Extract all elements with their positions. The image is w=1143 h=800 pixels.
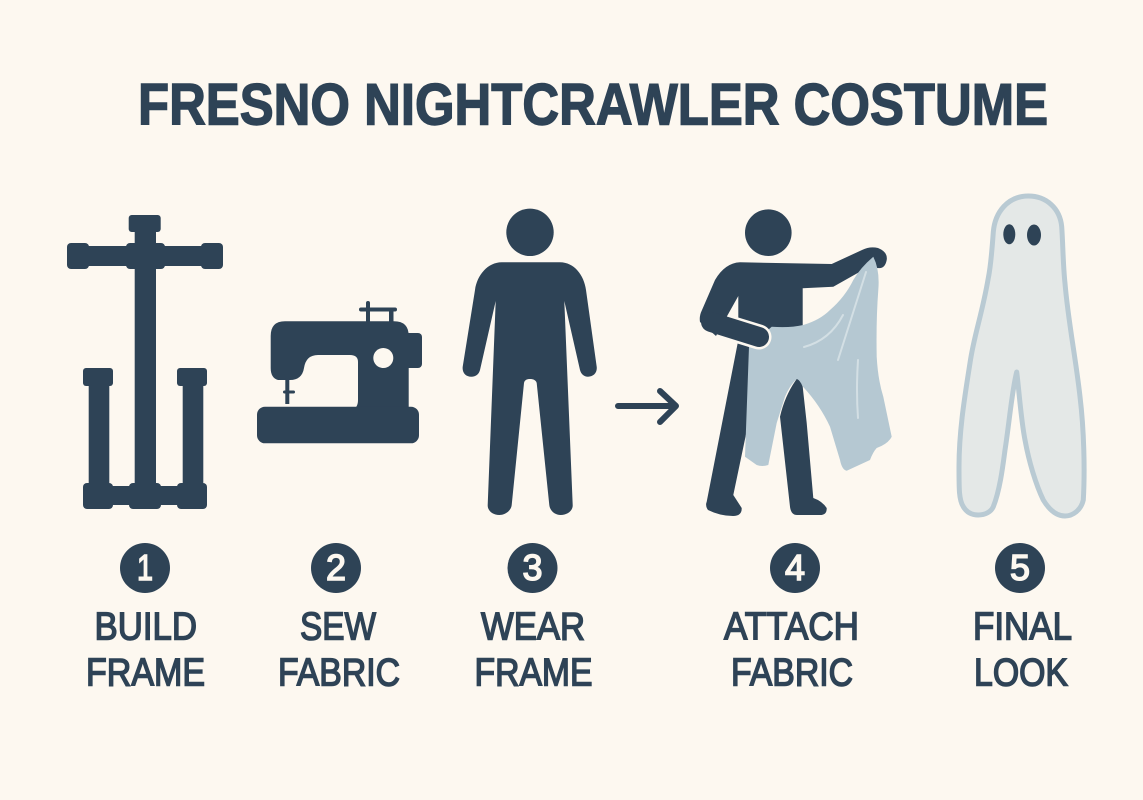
icon: pipe frame <box>67 215 223 509</box>
step 1: build frame: FRAME <box>86 652 205 694</box>
step 2: sew fabric: FABRIC <box>278 652 400 694</box>
step 2: sew fabric: 2 <box>326 547 346 588</box>
step 3: wear frame: FRAME <box>474 652 592 694</box>
step 3: wear frame: WEAR <box>481 606 585 648</box>
step 3: wear frame: 3 <box>522 547 542 588</box>
step 4: attach fabric: 4 <box>785 547 805 588</box>
step 4: attach fabric <box>724 543 859 694</box>
step 5: final look: FINAL <box>973 606 1072 648</box>
step 5: final look: 5 <box>1010 547 1030 588</box>
step 4: attach fabric: ATTACH <box>724 606 859 648</box>
arrow <box>618 391 676 422</box>
icon: sewing machine <box>257 301 422 443</box>
step 1: build frame: BUILD <box>94 606 197 648</box>
step 3: wear frame <box>474 543 592 694</box>
step 5: final look <box>973 543 1072 694</box>
icon: person standing <box>463 209 597 515</box>
icon: person attaching fabric <box>700 209 892 516</box>
step 1: build frame <box>86 543 205 694</box>
icon: ghost costume final look <box>959 196 1084 516</box>
step 4: attach fabric: FABRIC <box>731 652 853 694</box>
step 5: final look: LOOK <box>974 652 1068 694</box>
step 2: sew fabric: SEW <box>300 606 377 648</box>
step 1: build frame: 1 <box>137 547 153 588</box>
step 2: sew fabric <box>278 543 400 694</box>
